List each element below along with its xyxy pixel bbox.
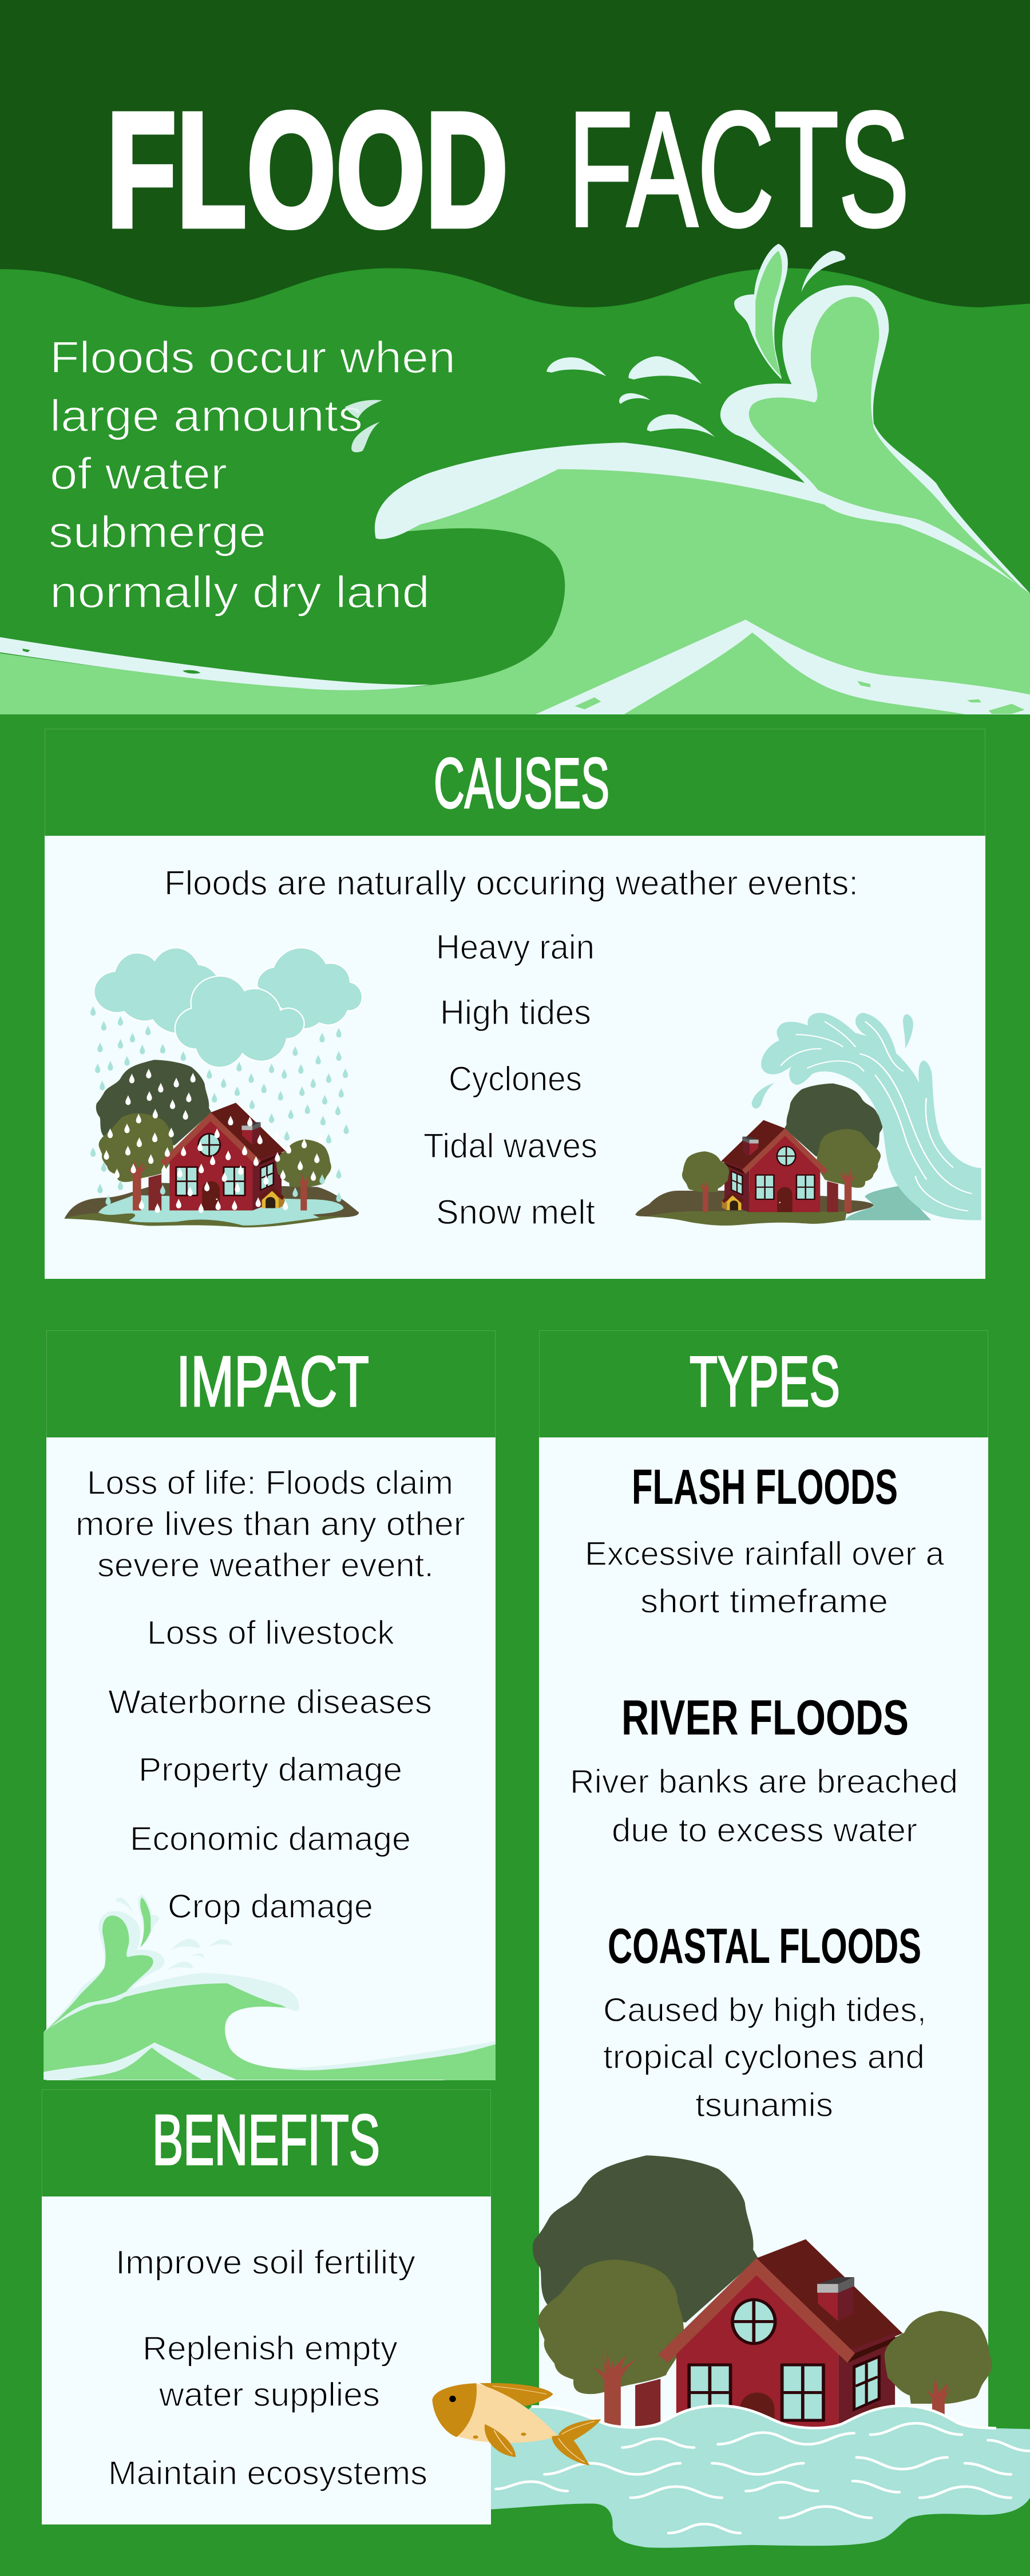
benefits header: BENEFITS: [152, 2101, 380, 2180]
benefits list: Maintain ecosystems: [108, 2455, 427, 2492]
causes list: High tides: [440, 993, 591, 1032]
illustration: flooded house: [490, 2155, 1030, 2548]
causes header: CAUSES: [434, 744, 609, 823]
illustration: tsunami over house: [635, 1013, 981, 1226]
panel: hero header: [0, 0, 1030, 714]
teal rain drops: [90, 1006, 349, 1205]
river floods: River banks are breached: [570, 1763, 958, 1800]
impact list: Crop damage: [168, 1888, 373, 1925]
illustration: small wave: [43, 1895, 496, 2080]
illustration: rain over house: [65, 948, 362, 1227]
dark wavy title band: [0, 0, 1030, 307]
impact list: Loss of livestock: [147, 1614, 395, 1652]
river floods: RIVER FLOODS: [621, 1690, 909, 1745]
impact list: Loss of life: Floods claim: [87, 1464, 453, 1502]
panel: causes: [45, 729, 985, 1279]
flash floods: short timeframe: [640, 1583, 888, 1620]
coastal floods: Caused by high tides,: [603, 1992, 926, 2029]
impact list: Waterborne diseases: [108, 1684, 432, 1721]
impact header: IMPACT: [176, 1342, 369, 1421]
impact header: [47, 1330, 496, 1438]
impact list: severe weather event.: [97, 1547, 434, 1584]
impact list: [76, 1464, 465, 1925]
panel: benefits: [42, 2089, 491, 2524]
panel: impact: [43, 1330, 496, 2080]
coastal floods: [603, 1919, 926, 2124]
intro text: [49, 332, 455, 617]
flash floods: [585, 1460, 945, 1620]
causes list: Snow melt: [436, 1193, 595, 1231]
impact list: more lives than any other: [76, 1506, 465, 1543]
intro text: large amounts: [50, 390, 363, 441]
benefits list: [108, 2244, 427, 2492]
coastal floods: tsunamis: [695, 2087, 833, 2124]
coastal floods: tropical cyclones and: [603, 2038, 925, 2076]
flash floods: FLASH FLOODS: [632, 1460, 898, 1515]
causes list: [423, 928, 597, 1231]
causes body: [45, 836, 985, 1279]
causes intro text: Floods are naturally occuring weather events:: [164, 864, 858, 902]
types body: [539, 1437, 988, 2428]
intro text: submerge: [49, 507, 266, 557]
clouds: [94, 948, 362, 1068]
impact body: [46, 1437, 496, 2080]
intro text: Floods occur when: [50, 332, 455, 382]
benefits list: water supplies: [159, 2376, 380, 2413]
impact list: Property damage: [138, 1751, 402, 1788]
flash floods: Excessive rainfall over a: [585, 1535, 945, 1573]
causes header: [45, 729, 985, 836]
benefits list: Replenish empty: [142, 2330, 398, 2367]
types header: TYPES: [690, 1342, 840, 1421]
causes list: Heavy rain: [436, 928, 595, 966]
benefits header: [42, 2089, 491, 2197]
intro text: of water: [50, 448, 227, 499]
causes list: Tidal waves: [423, 1127, 597, 1165]
river floods: [570, 1690, 958, 1849]
icon: fish: [432, 2383, 601, 2466]
river floods: due to excess water: [612, 1812, 917, 1849]
benefits body: [42, 2196, 491, 2524]
white rain drops: [104, 1069, 323, 1213]
impact list: Economic damage: [130, 1820, 411, 1858]
illustration: large wave: [0, 244, 1030, 714]
types header: [539, 1330, 988, 1438]
flood water: [490, 2406, 1030, 2548]
benefits list: Improve soil fertility: [116, 2244, 415, 2281]
intro text: normally dry land: [50, 567, 430, 617]
causes list: Cyclones: [449, 1060, 582, 1098]
title: FLOOD: [106, 79, 508, 261]
icon: water drops over text: [345, 400, 382, 452]
panel: types: [539, 1330, 988, 2428]
